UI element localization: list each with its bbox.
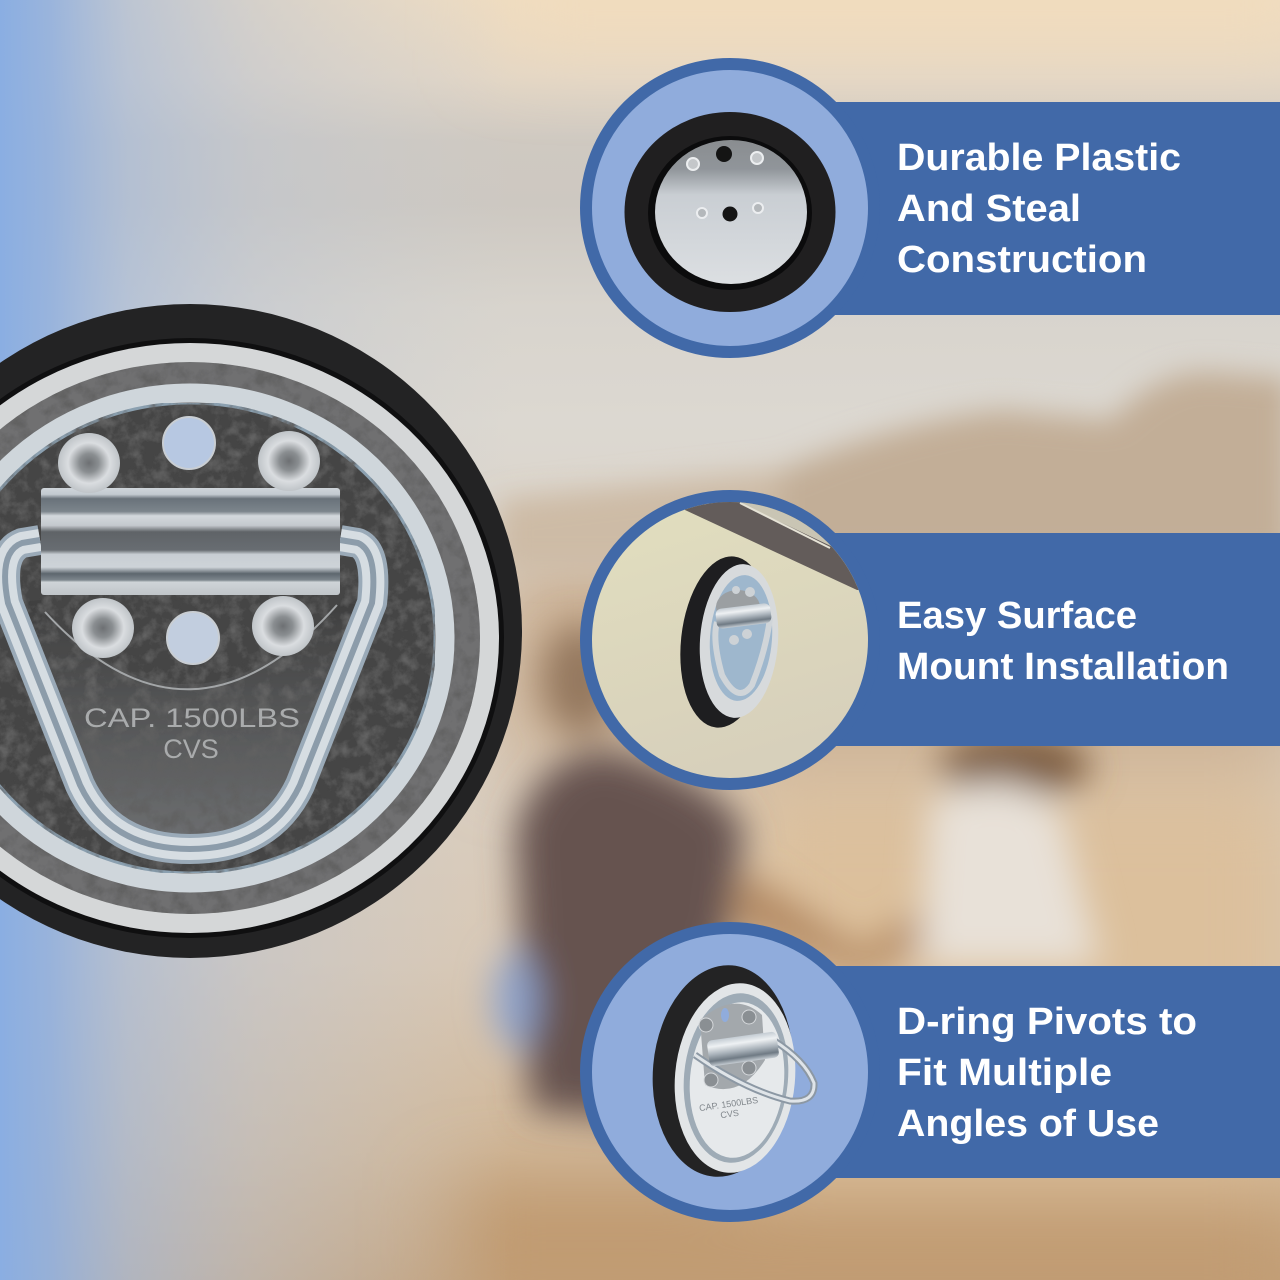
banner text bbox=[897, 595, 1229, 688]
banner text: Easy Surface bbox=[897, 595, 1137, 637]
D-ring wire bbox=[5, 540, 373, 849]
circle badge bbox=[586, 496, 874, 784]
stamped capacity text: CAP. 1500LBS bbox=[84, 703, 300, 733]
large D-ring product photo bbox=[0, 304, 522, 958]
hinge strap bbox=[41, 488, 340, 595]
banner bbox=[800, 966, 1280, 1178]
banner text: Angles of Use bbox=[897, 1103, 1159, 1145]
banner text: Durable Plastic bbox=[897, 137, 1181, 179]
large D-ring product photo: CVS bbox=[163, 734, 219, 764]
banner text bbox=[897, 1001, 1197, 1145]
panel: d-ring pivots bbox=[586, 928, 1280, 1216]
stamped plate bbox=[8, 600, 372, 849]
banner text: D-ring Pivots to bbox=[897, 1001, 1197, 1043]
icon: ring mounted on wall bbox=[680, 502, 858, 728]
banner bbox=[800, 533, 1280, 746]
icon: ring pivoted outward: CAP. 1500LBS bbox=[698, 1095, 759, 1113]
inner recess ring bbox=[0, 393, 445, 883]
banner text: Mount Installation bbox=[897, 646, 1229, 688]
outer steel ring bbox=[0, 343, 499, 933]
panel: easy surface mount installation bbox=[586, 480, 1280, 784]
icon: rear of mounting plate bbox=[624, 112, 836, 312]
banner text: Fit Multiple bbox=[897, 1052, 1112, 1094]
banner text: And Steal bbox=[897, 188, 1081, 230]
banner text bbox=[897, 137, 1181, 281]
banner bbox=[800, 102, 1280, 315]
circle badge bbox=[586, 928, 874, 1216]
icon: ring pivoted outward bbox=[644, 959, 814, 1183]
panel: durable plastic and steel construction bbox=[586, 64, 1280, 352]
circle badge bbox=[586, 64, 874, 352]
banner text: Construction bbox=[897, 239, 1147, 281]
icon: ring pivoted outward: CVS bbox=[720, 1108, 739, 1120]
rubber gasket bbox=[0, 304, 522, 958]
rivets bbox=[58, 431, 320, 658]
mounting holes bbox=[163, 417, 215, 469]
